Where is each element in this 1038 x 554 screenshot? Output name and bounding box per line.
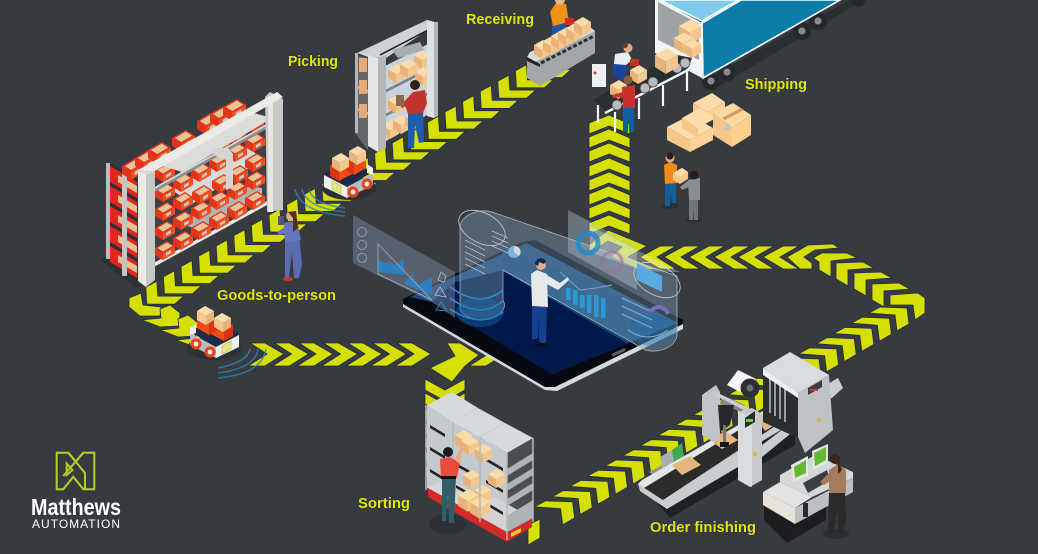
person: analyst <box>531 258 569 347</box>
order finishing machine <box>638 352 853 543</box>
scale with green display <box>649 443 684 480</box>
stacked cartons <box>667 93 751 152</box>
chevron leg: goods-to-person to receiving <box>146 54 571 304</box>
back wall screen <box>503 245 627 343</box>
logo wordmark: Matthews <box>31 494 121 520</box>
label: Shipping: Shipping <box>745 77 807 93</box>
person: orange worker handing box <box>662 152 688 209</box>
inspection camera <box>716 370 760 447</box>
control console <box>763 455 853 543</box>
left cylinder <box>450 203 511 327</box>
front column <box>738 408 762 487</box>
red robot bases <box>428 488 532 542</box>
conveyor frame <box>638 378 843 509</box>
label: Picking: Picking <box>288 54 338 70</box>
tablet screen <box>432 270 628 374</box>
chevron leg: down to sorting <box>425 379 465 487</box>
gantry frame <box>138 92 283 287</box>
shipping truck <box>655 0 865 90</box>
receiving conveyor <box>527 0 595 86</box>
truck side <box>702 0 840 78</box>
gantry rail and lift <box>153 122 270 193</box>
goods-to-person red bin rack <box>100 92 283 288</box>
conveyor body <box>527 27 595 86</box>
chevron leg: vertical to shipping <box>589 115 657 270</box>
picking gantry <box>357 20 438 152</box>
shelves on side <box>507 453 533 532</box>
shelf uprights <box>426 405 533 540</box>
person: picker in red <box>396 80 427 148</box>
rollers <box>612 58 690 110</box>
conveyor route: yellow chevron floor path <box>129 54 925 545</box>
conveyor belt <box>640 398 797 500</box>
top bins <box>122 99 272 180</box>
central tablet with holographic dashboard <box>353 203 686 391</box>
chevron leg: order finishing to sorting <box>528 307 909 545</box>
x-ray tunnel <box>763 352 833 453</box>
conveyor legs <box>598 70 687 132</box>
conveyor belt <box>593 55 692 112</box>
chevron leg: robot to sorting junction <box>248 343 505 382</box>
chevron leg: right corner <box>813 253 925 320</box>
person: woman with scanner <box>277 211 302 281</box>
label: Goods-to-person: Goods-to-person <box>217 288 336 304</box>
person: packer <box>613 42 639 80</box>
rack back and shelves <box>150 108 267 270</box>
person: operator <box>820 454 849 539</box>
goods-to-person robot lower <box>187 306 241 360</box>
person: sorter <box>429 446 467 534</box>
left chart panel <box>353 215 455 318</box>
person: packer in red <box>612 76 635 132</box>
label: Receiving: Receiving <box>466 12 534 28</box>
red bins on shelves <box>155 113 265 260</box>
Matthews Automation logo <box>31 453 121 531</box>
person: gray worker receiving box <box>680 170 702 223</box>
right cylinder <box>622 255 686 346</box>
parcels on belt <box>672 409 783 475</box>
truck opening <box>655 0 702 78</box>
boxes on conveyor <box>610 48 678 99</box>
boxes on shelves <box>455 430 505 519</box>
chevron corner: lower left turn <box>129 293 215 347</box>
logo mark <box>57 453 94 489</box>
shipping conveyor <box>592 42 692 132</box>
wireless signal lower <box>218 349 266 378</box>
monitors <box>791 444 828 482</box>
chevron leg: horizontal behind tablet <box>640 244 839 269</box>
picking station <box>355 20 438 152</box>
boxes in truck <box>674 20 701 58</box>
truck wheels <box>702 0 865 90</box>
right chart panel <box>568 210 680 292</box>
truck roof <box>660 0 738 21</box>
boxes on conveyor <box>534 17 591 59</box>
tablet home button <box>611 348 626 357</box>
person: receiver in orange <box>550 0 574 38</box>
tablet body <box>403 241 683 391</box>
sorting shelf robots <box>426 392 533 542</box>
left gantry post <box>702 385 720 442</box>
goods-to-person robot upper <box>322 146 376 200</box>
dashboard pie and table <box>492 231 521 258</box>
rack side bays <box>106 163 137 278</box>
label: Sorting: Sorting <box>358 496 410 512</box>
shelf tops <box>427 392 478 422</box>
label: Order finishing: Order finishing <box>650 520 756 536</box>
wireless signal upper <box>295 189 345 216</box>
belt base <box>648 425 795 518</box>
picking shelves <box>355 43 432 150</box>
shelf labels <box>430 425 503 515</box>
glass wall band <box>460 211 677 351</box>
control box <box>592 64 606 87</box>
bar chart on wall <box>560 272 612 318</box>
shelf backs <box>427 405 507 540</box>
logo descriptor: AUTOMATION <box>32 517 120 531</box>
